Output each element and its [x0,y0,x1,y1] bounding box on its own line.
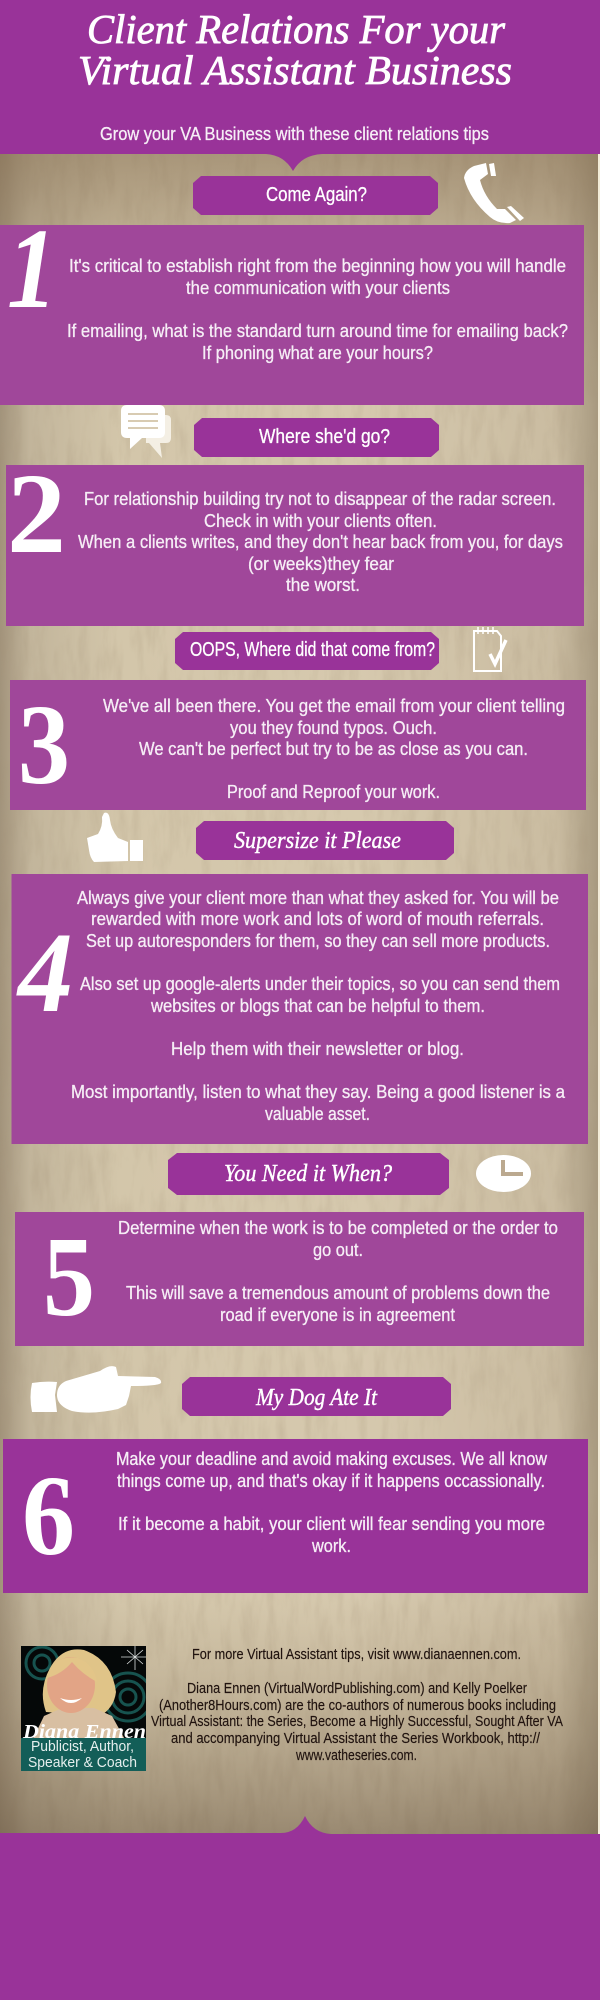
author photo badge: Diana Ennen [22,1721,146,1743]
panel: tip 4 [12,874,588,1144]
tip 6 text: If it become a habit, your client will fear sending you more [118,1514,545,1534]
tip 2 text: For relationship building try not to disappear of the radar screen. [84,489,556,509]
icon: pointing hand [30,1366,161,1413]
tip 4 text: rewarded with more work and lots of word of mouth referrals. [91,909,544,929]
ribbon: OOPS, Where did that come from?: OOPS, Where did that come from? [190,639,435,661]
title [78,6,512,93]
tip 6 text: work. [311,1536,351,1556]
section 6: my dog ate it [3,1366,588,1593]
ribbon: You Need it When?: You Need it When? [224,1161,392,1187]
ribbon: My Dog Ate It [182,1377,451,1416]
tip 3 text: you they found typos. Ouch. [230,718,437,738]
tip 1 text: the communication with your clients [186,278,450,298]
tip 5 text: road if everyone is in agreement [220,1305,455,1325]
tip 5 text: This will save a tremendous amount of problems down the [126,1283,550,1303]
panel: tip 2 [6,450,584,626]
number 2: 2 [7,450,66,577]
panel: tip 5 [15,1212,584,1346]
panel: tip 1 [0,205,584,405]
section 3: oops [10,627,586,810]
title: Virtual Assistant Business [78,47,512,93]
tip 4 text [71,888,566,1124]
footer credit text: Diana Ennen (VirtualWordPublishing.com) and Kelly Poelker [187,1681,527,1697]
tip 3 text: Proof and Reproof your work. [227,782,440,802]
footer credit text: (Another8Hours.com) are the co-authors of numerous books including [159,1698,556,1714]
tip 5 text: Determine when the work is to be completed or the order to [118,1218,558,1238]
footer credit text: and accompanying Virtual Assistant the Series Workbook, http:// [171,1731,541,1747]
tip 4 text: Help them with their newsletter or blog. [171,1039,464,1059]
number 5: 5 [43,1213,95,1340]
icon: notepad with check [474,627,506,671]
tip 1 text [67,256,568,363]
number 4: 4 [16,909,73,1036]
icon: thumbs up [87,813,143,862]
tip 3 text: We can't be perfect but try to be as close as you can. [139,739,528,759]
ribbon: Supersize it Please [196,821,454,860]
number 1: 1 [7,205,57,332]
ribbon: Come Again?: Come Again? [266,184,367,206]
header band [0,0,600,171]
tip 3 text [103,696,565,802]
tip 1 text: It's critical to establish right from the beginning how you will handle [69,256,566,276]
tip 2 text: When a clients writes, and they don't hear back from you, for days [78,532,563,552]
tip 1 text: If phoning what are your hours? [202,343,433,363]
tip 2 text: Check in with your clients often. [204,511,437,531]
tip 4 text: Set up autoresponders for them, so they can sell more products. [86,931,550,951]
tip 2 text: the worst. [286,575,360,595]
tip 2 text [78,489,563,595]
icon: speech bubbles [121,405,171,458]
ribbon: Where she'd go?: Where she'd go? [259,426,390,448]
author photo badge: Speaker & Coach [28,1754,137,1771]
ribbon: My Dog Ate It: My Dog Ate It [255,1385,378,1411]
subtitle: Grow your VA Business with these client relations tips [100,124,489,144]
section 4: supersize [12,813,588,1144]
tip 4 text: valuable asset. [265,1104,370,1124]
tip 2 text: (or weeks)they fear [248,554,394,574]
tip 4 text: Most importantly, listen to what they say. Being a good listener is a [71,1082,566,1102]
tip 1 text: If emailing, what is the standard turn around time for emailing back? [67,321,568,341]
title: Client Relations For your [87,6,506,52]
tip 6 text [116,1449,548,1556]
section 5: you need it when [15,1153,584,1346]
author photo badge [21,1646,152,1771]
ribbon: You Need it When? [168,1153,449,1195]
icon: clock [476,1155,531,1192]
number 6: 6 [22,1452,75,1579]
number 3: 3 [18,681,70,808]
author photo badge: Publicist, Author, [31,1738,134,1755]
tip 5 text: go out. [313,1240,363,1260]
tip 5 text [118,1218,558,1325]
ribbon: OOPS, Where did that come from? [175,632,439,670]
tip 4 text: websites or blogs that can be helpful to them. [150,996,485,1016]
ribbon: Supersize it Please: Supersize it Please [234,828,401,854]
tip 4 text: Always give your client more than what they asked for. You will be [77,888,559,908]
section 2: where she'd go [6,405,584,626]
footer band [0,1816,600,2000]
icon: telephone [464,163,524,223]
section 1: come again [0,163,584,405]
tip 3 text: We've all been there. You get the email from your client telling [103,696,565,716]
tip 6 text: things come up, and that's okay if it happens occassionally. [117,1471,545,1491]
panel: tip 6 [3,1439,588,1593]
footer credit text: For more Virtual Assistant tips, visit www.dianaennen.com. [192,1647,521,1663]
tip 6 text: Make your deadline and avoid making excuses. We all know [116,1449,548,1469]
footer credit text: www.vatheseries.com. [295,1748,417,1764]
ribbon: Where she'd go? [194,418,439,457]
footer credit text [151,1647,563,1764]
panel: tip 3 [10,680,586,810]
tip 4 text: Also set up google-alerts under their topics, so you can send them [80,974,560,994]
ribbon: Come Again? [193,176,438,215]
